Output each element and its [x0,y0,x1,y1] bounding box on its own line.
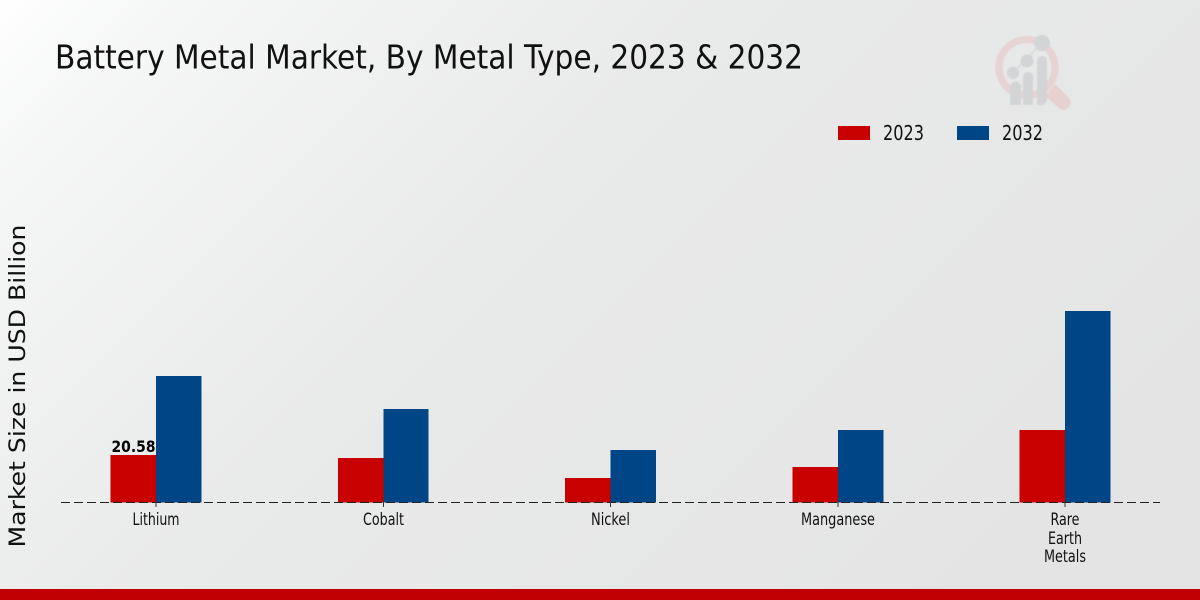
legend [838,121,1043,145]
category label: Rare Earth Metals [1044,510,1086,566]
title: Battery Metal Market, By Metal Type, 2023 & 2032 [55,37,803,76]
bars: Manganese [792,430,884,502]
legend item: 2023: 2023 [883,121,924,145]
data label: 20.58 [112,437,156,456]
y axis title: Market Size in USD Billion [5,224,31,548]
icon: watermark logo magnifier with bars [999,35,1071,110]
bars: Cobalt [338,409,428,502]
category label: Manganese: Manganese [801,510,875,529]
category label: Cobalt: Cobalt [363,510,404,529]
bar chart [61,311,1160,566]
category label: Lithium: Lithium [132,510,180,529]
category label: Rare Earth Metals: Metals [1044,547,1086,566]
bars: Lithium [110,376,202,502]
category label: Rare Earth Metals: Rare [1050,510,1080,529]
bars: Rare Earth Metals [1020,311,1110,502]
bottom red band [0,589,1200,600]
category label: Rare Earth Metals: Earth [1048,529,1082,548]
legend item: 2032 [957,121,1043,145]
category label: Nickel: Nickel [591,510,630,529]
legend item: 2023 [838,121,924,145]
bars: Nickel [565,450,656,502]
legend item: 2032: 2032 [1002,121,1043,145]
baseline axis [61,502,1160,504]
